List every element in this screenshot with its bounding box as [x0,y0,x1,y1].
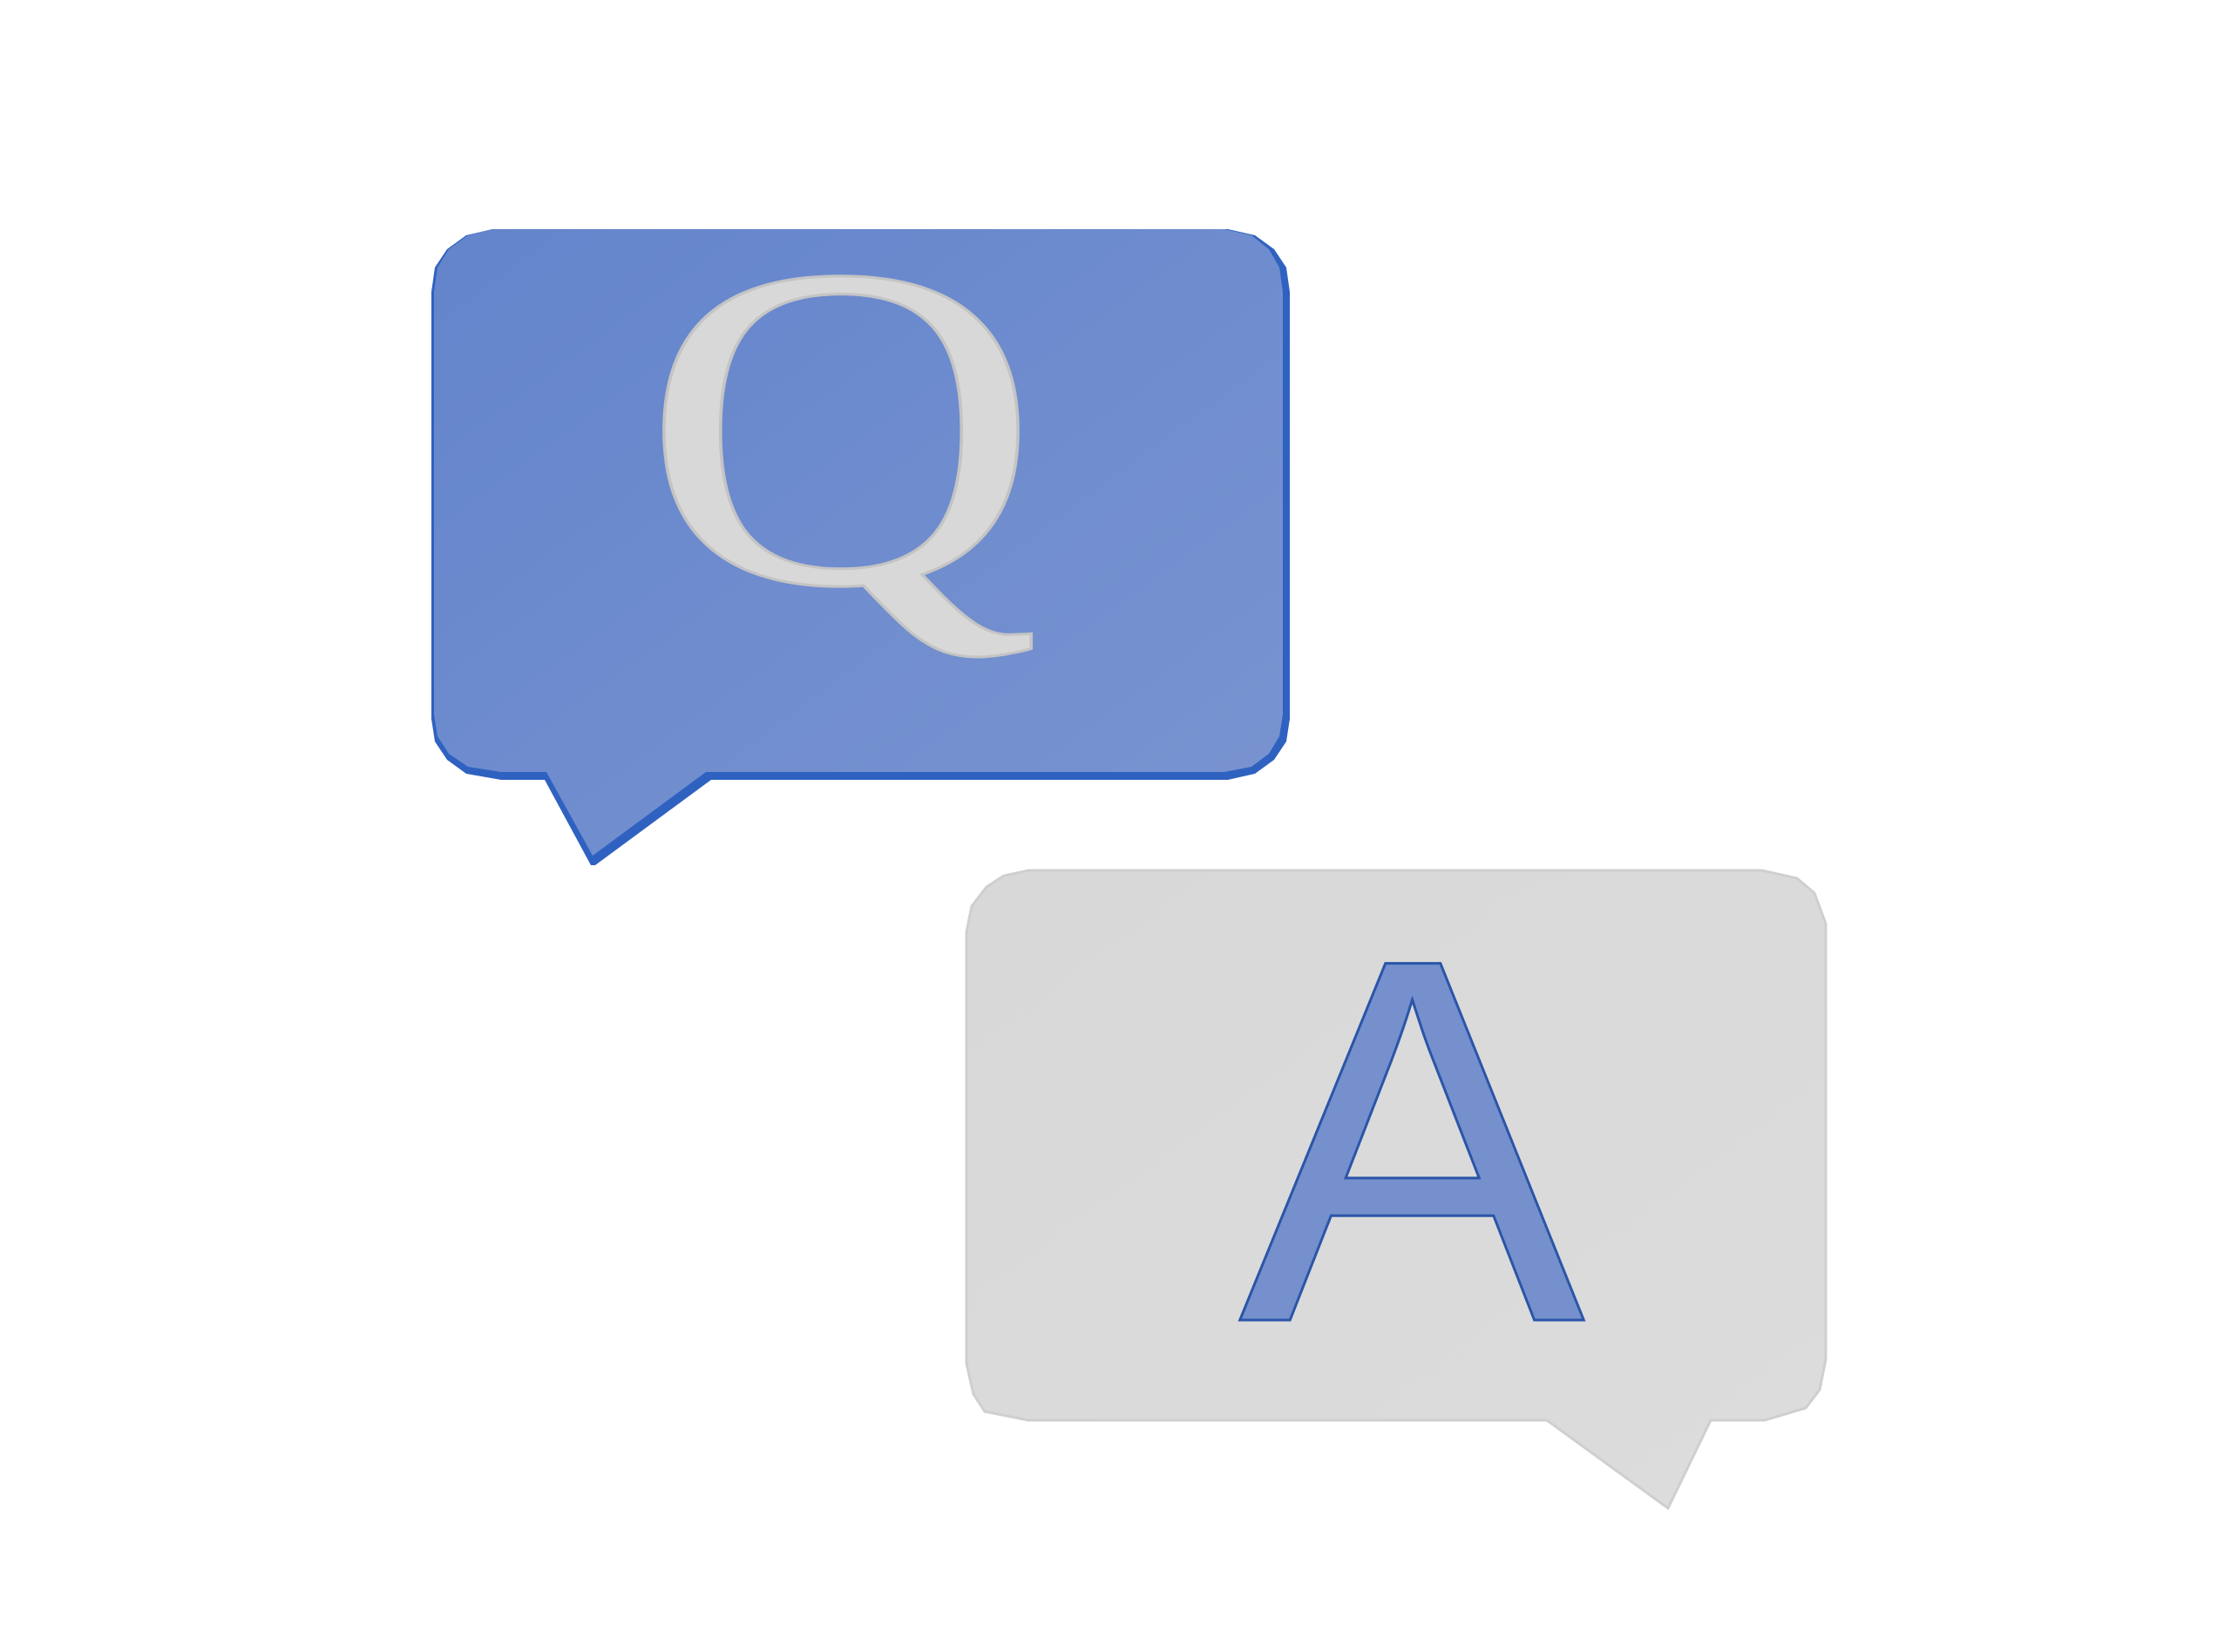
Q speech bubble [431,171,1290,865]
letter Q: Q [641,171,1041,682]
A speech bubble [966,851,1826,1508]
letter A: A [1239,851,1587,1431]
